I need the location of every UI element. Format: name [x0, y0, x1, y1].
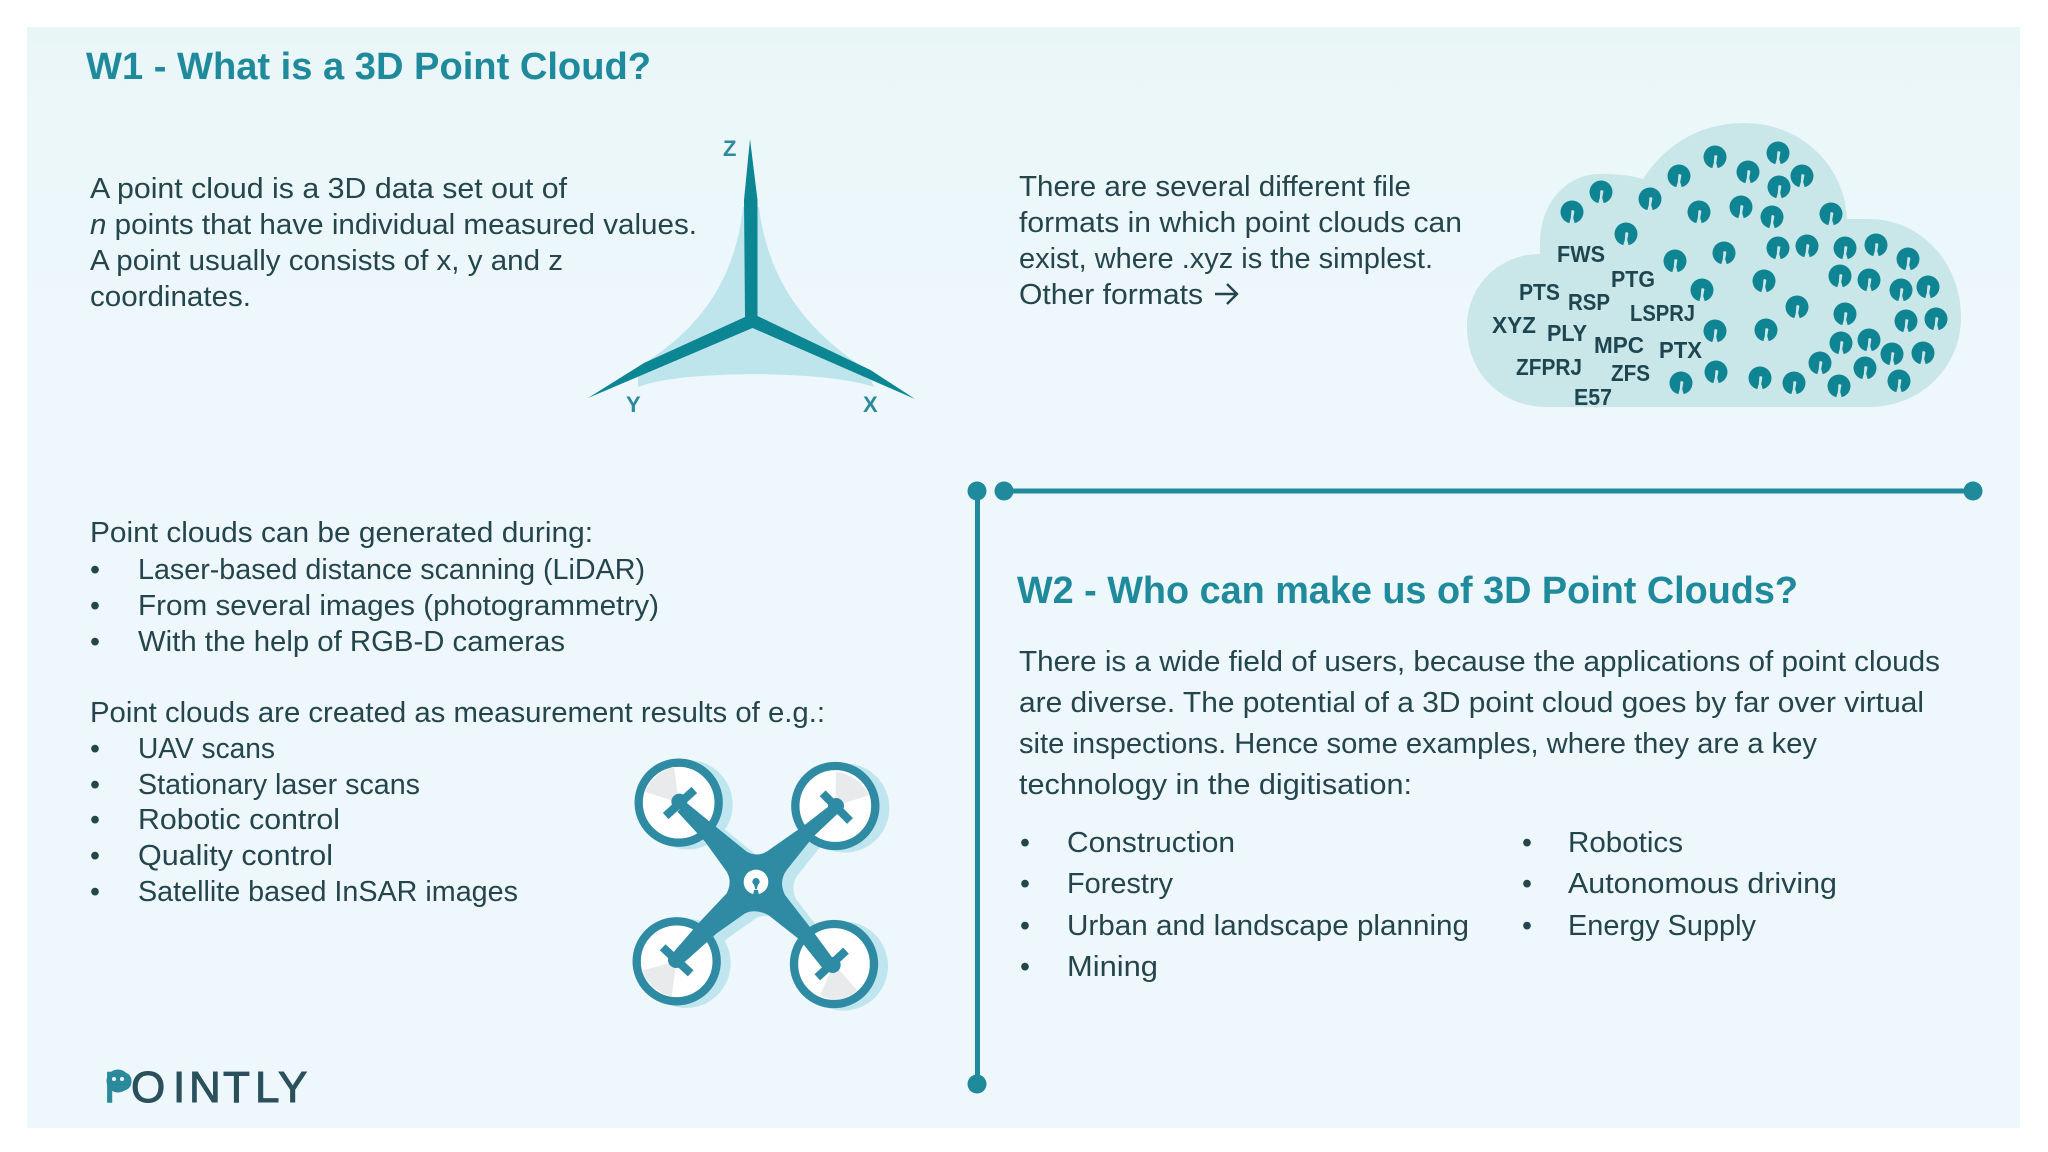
text block: how point clouds are generated: From several images (photogrammetry): [138, 590, 659, 622]
text block: file formats: Other formats: [1019, 279, 1203, 311]
text block: how point clouds are generated: With the help of RGB-D cameras: [138, 626, 565, 658]
icon: cloud of file formats: MPC: [1594, 332, 1644, 358]
icon: cloud of file formats: E57: [1574, 384, 1612, 410]
text block: point cloud definition: coordinates.: [90, 281, 251, 313]
logo: POINTLY: OINTLY: [131, 1063, 307, 1112]
text block: how point clouds are generated: •: [90, 590, 100, 622]
text block: measurement sources: •: [90, 769, 100, 801]
list: application fields right column: Robotics: [1568, 827, 1683, 859]
icon: cloud of file formats: RSP: [1568, 289, 1610, 315]
text block: measurement sources: Robotic control: [138, 804, 340, 836]
list: application fields right column: [1522, 827, 1837, 942]
icon: cloud of file formats: PTX: [1659, 337, 1703, 363]
text block: measurement sources: Quality control: [138, 840, 333, 872]
icon: cloud of file formats: PTS: [1519, 279, 1560, 305]
text block: how point clouds are generated: •: [90, 554, 100, 586]
arrow: to other formats: [1215, 284, 1237, 304]
text block: measurement sources: UAV scans: [138, 733, 275, 765]
icon: cloud of file formats: XYZ: [1492, 312, 1536, 338]
icon: cloud of file formats: PTG: [1611, 266, 1655, 292]
text block: measurement sources: Point clouds are created as measurement results of e.g.:: [90, 697, 825, 729]
icon: cloud of file formats: LSPRJ: [1630, 300, 1695, 326]
list: application fields right column: •: [1522, 827, 1532, 859]
list: application fields left column: Construction: [1067, 827, 1235, 859]
text block: point cloud definition: n points that have individual measured values.: [90, 209, 697, 241]
text block: how point clouds are generated: Laser-based distance scanning (LiDAR): [138, 554, 645, 586]
title: W1: W1 - What is a 3D Point Cloud?: [86, 46, 651, 88]
icon: cloud of file formats: ZFS: [1611, 360, 1650, 386]
text block: measurement sources: •: [90, 876, 100, 908]
list: application fields right column: Energy Supply: [1568, 910, 1757, 942]
list: application fields left column: Forestry: [1067, 868, 1174, 900]
text block: users of point clouds: There is a wide field of users, because the applications of point clouds: [1019, 646, 1940, 678]
text block: file formats: There are several different file: [1019, 171, 1411, 203]
text block: measurement sources: Satellite based InSAR images: [138, 876, 518, 908]
list: application fields left column: •: [1020, 910, 1030, 942]
text block: how point clouds are generated: •: [90, 626, 100, 658]
list: application fields left column: •: [1020, 868, 1030, 900]
logo: POINTLY: P: [104, 1063, 133, 1112]
icon: cloud of file formats: PLY: [1547, 320, 1587, 346]
icon: cloud of file formats: FWS: [1557, 241, 1605, 267]
icon: 3D axes: [588, 136, 915, 417]
text block: how point clouds are generated: [90, 517, 659, 658]
text block: file formats: formats in which point clouds can: [1019, 207, 1462, 239]
list: application fields left column: •: [1020, 951, 1030, 983]
text block: point cloud definition: A point usually consists of x, y and z: [90, 245, 563, 277]
list: application fields right column: •: [1522, 868, 1532, 900]
text block: measurement sources: Stationary laser scans: [138, 769, 420, 801]
text block: users of point clouds: technology in the digitisation:: [1019, 769, 1412, 801]
heading: W2: W2 - Who can make us of 3D Point Clouds?: [1017, 570, 1798, 612]
text block: users of point clouds: are diverse. The potential of a 3D point cloud goes by far over virtual: [1019, 687, 1924, 719]
text block: how point clouds are generated: Point clouds can be generated during:: [90, 517, 593, 549]
icon: 3D axes: X: [863, 392, 878, 417]
list: application fields left column: Urban and landscape planning: [1067, 910, 1469, 942]
list: application fields right column: •: [1522, 910, 1532, 942]
text block: measurement sources: •: [90, 804, 100, 836]
icon: drone: [637, 760, 889, 1011]
icon: 3D axes: Z: [723, 136, 736, 161]
frame: W2 section divider: [968, 482, 1982, 1094]
icon: 3D axes: Y: [626, 392, 641, 417]
text block: file formats: [1019, 171, 1462, 311]
text block: users of point clouds: site inspections. Hence some examples, where they are a key: [1019, 728, 1818, 760]
text block: measurement sources: [90, 697, 825, 908]
list: application fields right column: Autonomous driving: [1568, 868, 1837, 900]
text block: measurement sources: •: [90, 840, 100, 872]
text block: point cloud definition: A point cloud is a 3D data set out of: [90, 173, 567, 205]
list: application fields left column: [1020, 827, 1469, 983]
text block: measurement sources: •: [90, 733, 100, 765]
text block: point cloud definition: [90, 173, 697, 313]
icon: cloud of file formats: ZFPRJ: [1516, 354, 1582, 380]
text block: users of point clouds: [1019, 646, 1940, 801]
list: application fields left column: Mining: [1067, 951, 1158, 983]
list: application fields left column: •: [1020, 827, 1030, 859]
icon: cloud of file formats: [1467, 123, 1961, 410]
text block: file formats: exist, where .xyz is the simplest.: [1019, 243, 1433, 275]
